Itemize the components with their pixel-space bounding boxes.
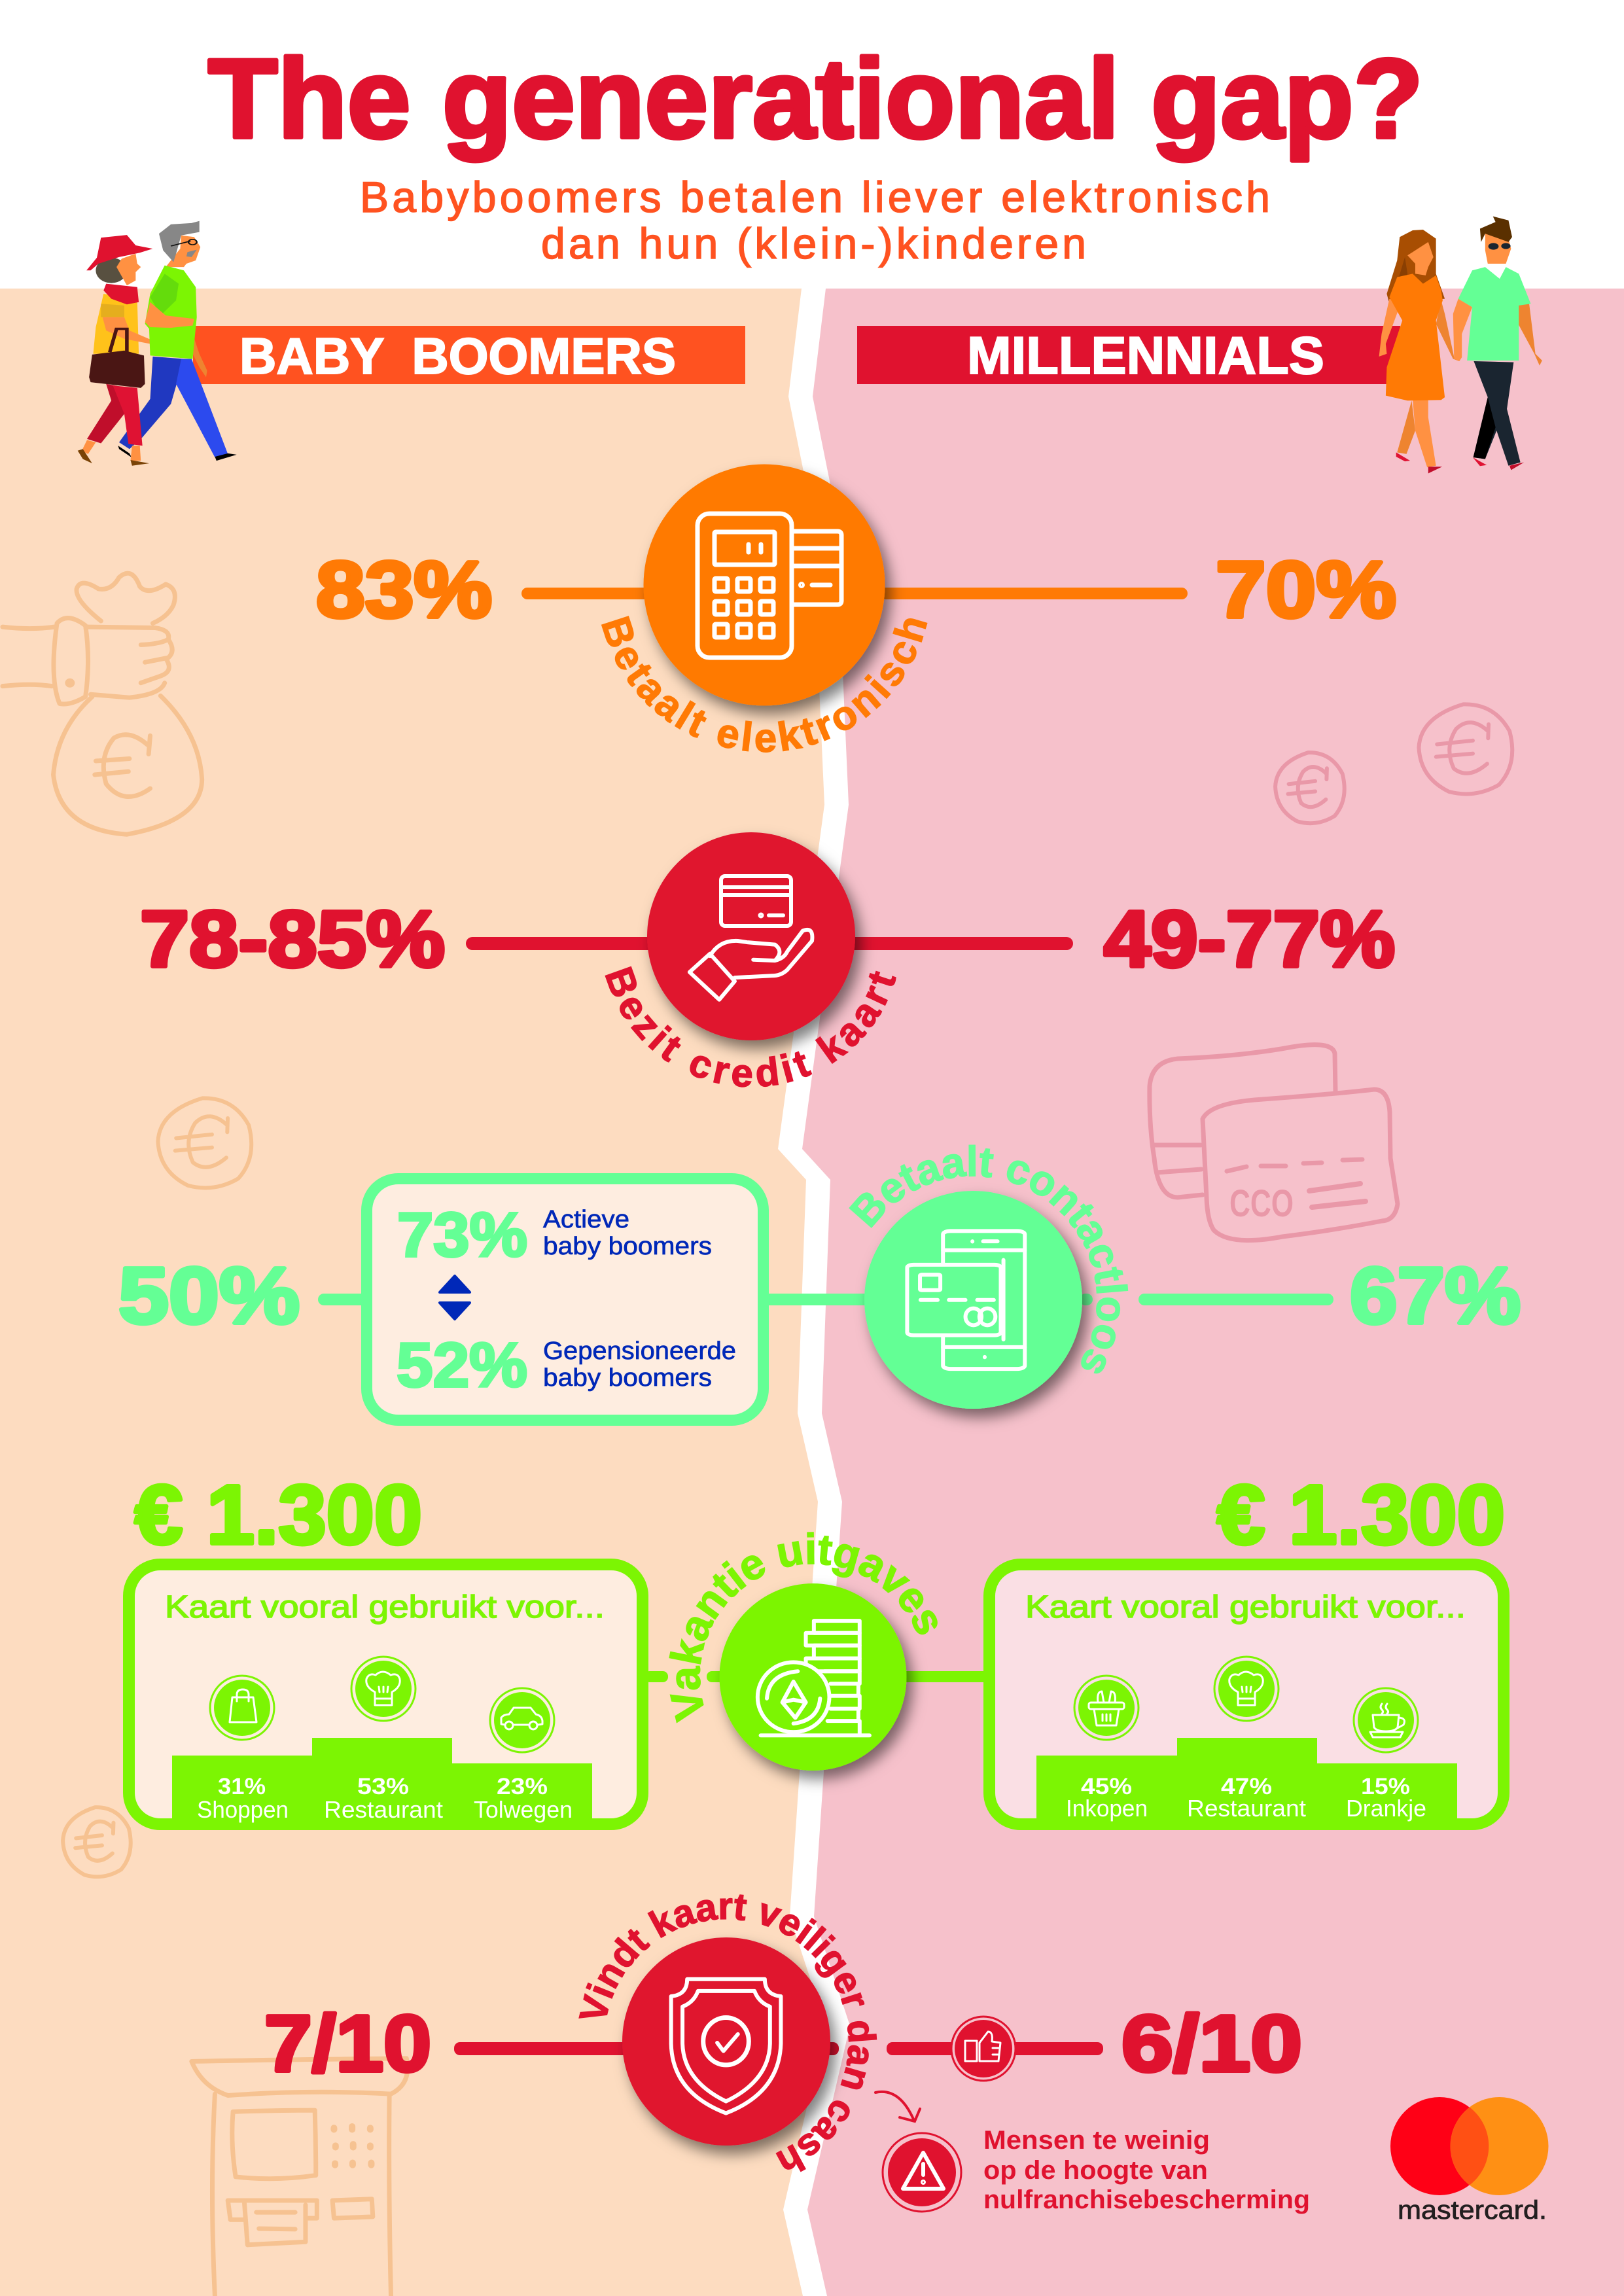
circle bbox=[622, 1937, 830, 2146]
bar labels: Shoppen bbox=[197, 1796, 289, 1823]
value: millennials 6/10: 6/10 bbox=[1121, 1999, 1302, 2088]
icon: payment terminal and card bbox=[697, 514, 841, 658]
bar labels: 31% bbox=[218, 1774, 266, 1799]
panel: millennials background bbox=[802, 289, 1624, 2296]
bar labels bbox=[197, 1774, 573, 1823]
row 2: bezit credit kaart bbox=[140, 831, 1395, 1087]
warning text: Mensen te weinig bbox=[983, 2126, 1210, 2155]
bar labels: 15% bbox=[1361, 1774, 1410, 1799]
icon: coin stack bbox=[758, 1621, 870, 1735]
sketch: euro coin left bbox=[158, 1098, 251, 1188]
row 3: betaalt contactloos bbox=[118, 1145, 1521, 1428]
connector lines bbox=[318, 1294, 1333, 1305]
panel: baby boomers card use bbox=[129, 1564, 643, 1826]
sketch: euro coin right small bbox=[1275, 752, 1345, 823]
icon: chef hat bbox=[1214, 1657, 1279, 1721]
circle bbox=[644, 465, 885, 705]
bar labels: Tolwegen bbox=[474, 1796, 573, 1823]
circle bbox=[647, 832, 855, 1040]
icon: car bbox=[490, 1688, 554, 1752]
icon: coffee cup bbox=[1354, 1688, 1418, 1752]
warning text: nulfranchisebescherming bbox=[983, 2185, 1310, 2214]
icon: shopping bag bbox=[210, 1676, 274, 1740]
illustration: baby boomer couple bbox=[78, 221, 237, 466]
curved label: Betaalt elektronisch bbox=[601, 616, 928, 752]
icon: phone and card bbox=[907, 1231, 1025, 1369]
connector lines bbox=[454, 2042, 1103, 2055]
bar labels: 47% bbox=[1221, 1774, 1272, 1799]
stat: 73%: 73% bbox=[397, 1200, 527, 1270]
bar labels: Drankje bbox=[1346, 1795, 1426, 1822]
stat: 52%: 52% bbox=[397, 1330, 527, 1400]
subtitle: dan hun (klein-)kinderen bbox=[541, 219, 1086, 268]
value: millennials 49-77%: 49-77% bbox=[1104, 894, 1395, 983]
sketch: euro coin right large bbox=[1419, 704, 1512, 794]
stat label: gepensioneerde: baby boomers bbox=[543, 1364, 712, 1392]
subtitle: Babyboomers betalen liever elektronisch bbox=[360, 173, 1270, 221]
header bar: baby boomers: BABY BOOMERS bbox=[239, 327, 676, 385]
arrow bbox=[875, 2092, 920, 2121]
value: baby boomers 83%: 83% bbox=[316, 545, 492, 634]
bar labels: 53% bbox=[357, 1774, 409, 1799]
value: baby boomers 78-85%: 78-85% bbox=[140, 894, 445, 983]
sketch: credit cards bbox=[1150, 1045, 1398, 1241]
icon: hand holding card bbox=[690, 876, 812, 1000]
row 4: vakantie uitgaves bbox=[123, 1468, 1509, 1830]
circle bbox=[720, 1583, 907, 1771]
curved label: Bezit credit kaart bbox=[605, 966, 896, 1087]
icon: warning bbox=[883, 2133, 961, 2212]
subtitle bbox=[360, 173, 1270, 268]
connector line bbox=[521, 588, 1188, 599]
illustration: millennial couple bbox=[1379, 217, 1542, 473]
value: baby boomers € 1.300: € 1.300 bbox=[135, 1468, 422, 1562]
connector line bbox=[466, 937, 1073, 950]
stat label: gepensioneerde bbox=[543, 1337, 736, 1392]
curved label: Vindt kaart veiliger dan cash bbox=[578, 1894, 877, 2172]
icon: thumbs up bbox=[951, 2017, 1015, 2081]
header bar: millennials: MILLENNIALS bbox=[967, 327, 1324, 385]
value: baby boomers 7/10: 7/10 bbox=[264, 1999, 431, 2088]
sketch: ATM bbox=[192, 2058, 408, 2296]
podium bars bbox=[1036, 1738, 1457, 1826]
connector lines bbox=[644, 1671, 985, 1682]
heading: Kaart vooral gebruikt voor... bbox=[1025, 1590, 1466, 1625]
panel: millennials card use bbox=[989, 1564, 1504, 1826]
stat label: actieve: Actieve bbox=[543, 1206, 629, 1233]
value: millennials 67%: 67% bbox=[1350, 1251, 1521, 1340]
heading: Kaart vooral gebruikt voor... bbox=[165, 1590, 605, 1625]
row 5: vindt kaart veiliger dan cash bbox=[264, 1894, 1310, 2214]
bar labels: Restaurant bbox=[324, 1796, 443, 1823]
curved label: Betaalt contactloos bbox=[849, 1145, 1128, 1374]
icon: shield with check bbox=[671, 1979, 781, 2113]
icon: chef hat bbox=[351, 1657, 415, 1721]
sketch: euro coin lower left bbox=[63, 1807, 131, 1877]
title: The generational gap? bbox=[208, 36, 1423, 162]
stat label: actieve bbox=[543, 1206, 712, 1260]
bar labels: 23% bbox=[497, 1774, 548, 1799]
stat label: gepensioneerde: Gepensioneerde bbox=[543, 1337, 736, 1365]
bar labels: Inkopen bbox=[1066, 1795, 1148, 1822]
podium bars bbox=[172, 1738, 592, 1826]
icon: up down arrows bbox=[440, 1276, 470, 1319]
warning text bbox=[983, 2126, 1310, 2214]
stat label: actieve: baby boomers bbox=[543, 1233, 712, 1260]
curved label: Vakantie uitgaves bbox=[669, 1532, 938, 1723]
icon: basket bbox=[1074, 1676, 1139, 1740]
bar labels: 45% bbox=[1081, 1774, 1132, 1799]
bar labels: Restaurant bbox=[1187, 1795, 1306, 1822]
value: baby boomers 50%: 50% bbox=[118, 1251, 300, 1340]
logo: mastercard: mastercard. bbox=[1398, 2196, 1547, 2225]
value: millennials € 1.300: € 1.300 bbox=[1217, 1468, 1505, 1562]
row 1: betaalt elektronisch bbox=[316, 463, 1396, 752]
header bar: millennials bbox=[857, 326, 1400, 385]
panel: active vs retired bbox=[366, 1179, 763, 1420]
bar labels bbox=[1066, 1774, 1426, 1822]
warning text: op de hoogte van bbox=[983, 2156, 1208, 2185]
logo: mastercard bbox=[1390, 2097, 1548, 2225]
value: millennials 70%: 70% bbox=[1216, 545, 1396, 634]
sketch: credit cards: CCO bbox=[1229, 1182, 1294, 1225]
circle bbox=[864, 1191, 1082, 1409]
sketch: hand holding money bag bbox=[3, 573, 202, 834]
panel: baby boomers background bbox=[0, 289, 826, 2296]
